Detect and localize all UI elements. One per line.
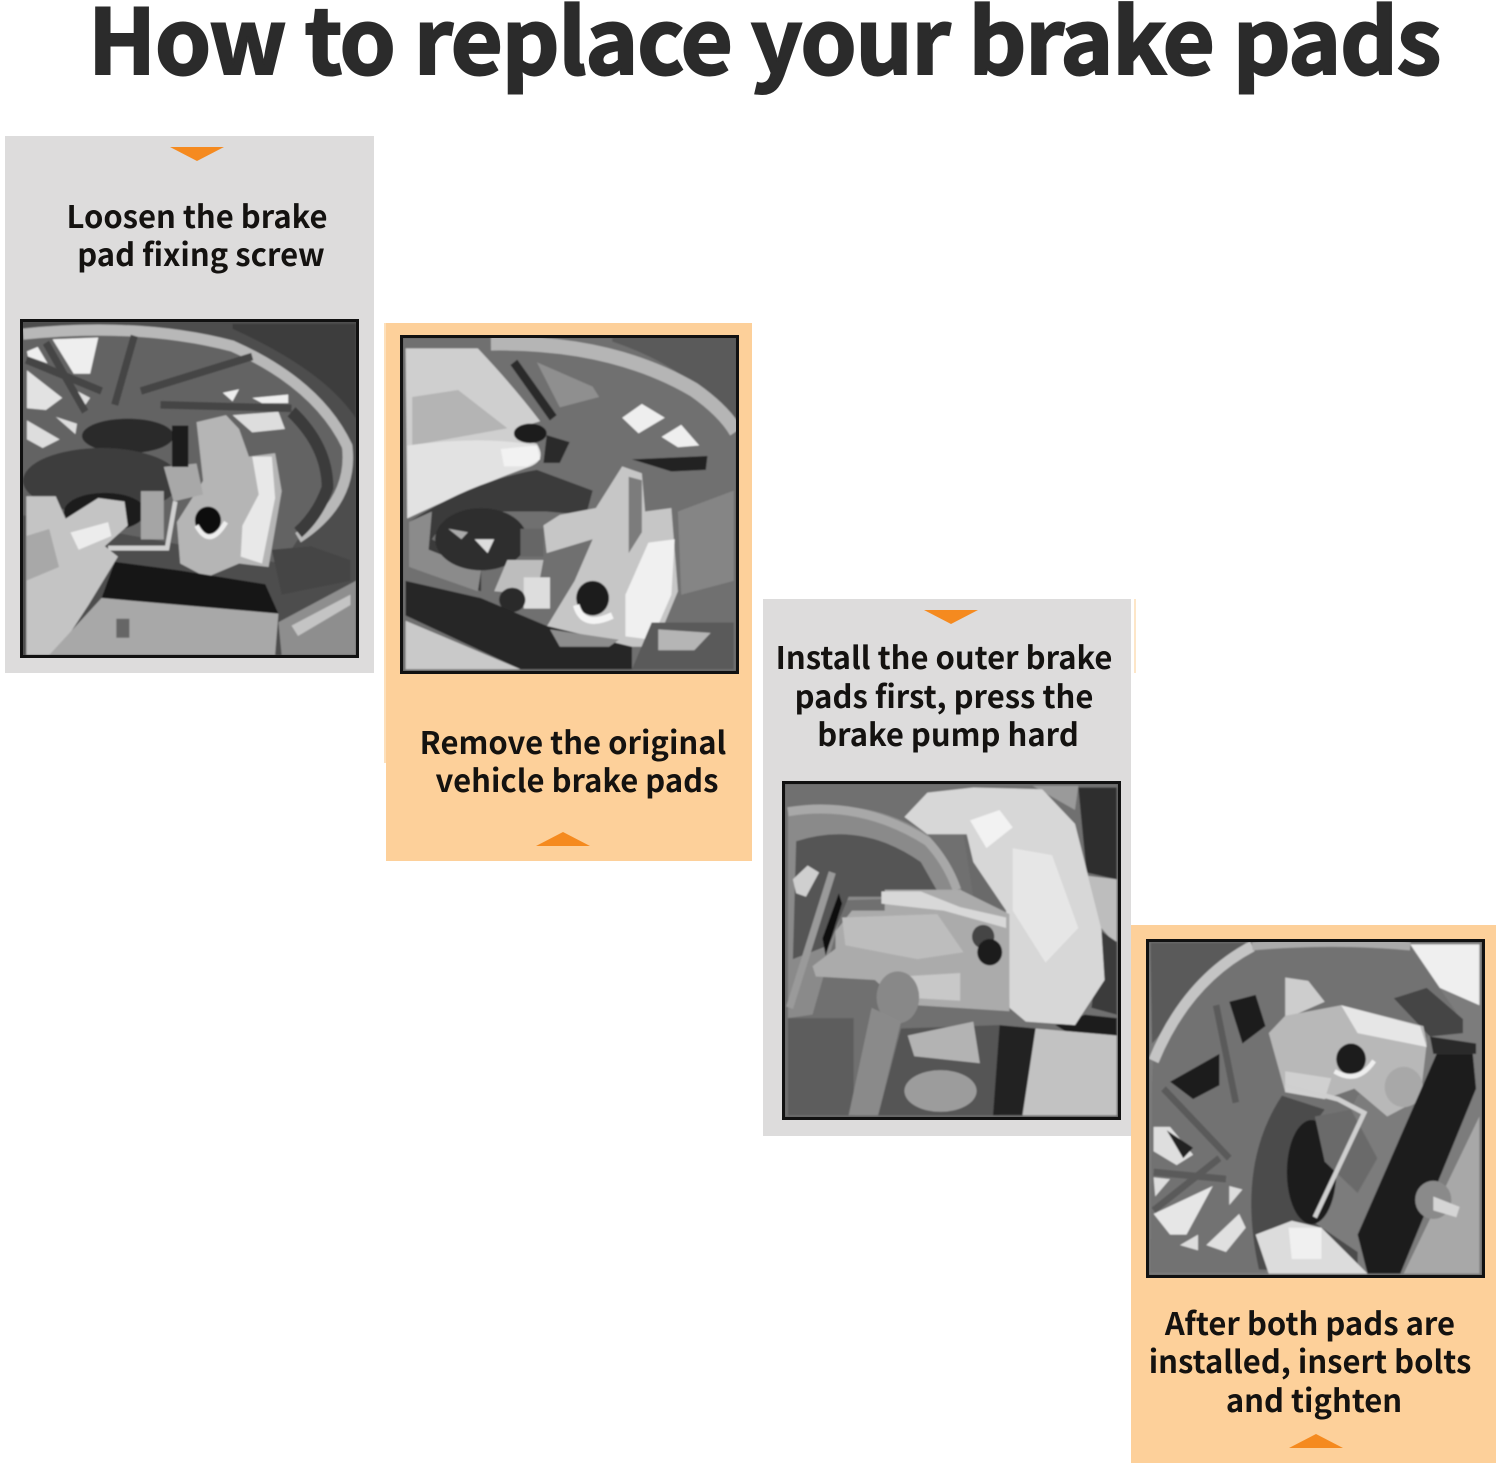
- text: step 3 caption: pads first, press the: [795, 672, 1093, 717]
- photo: fingers removing brake pad pin: [400, 335, 739, 674]
- photo: hand loosening caliper screw with hex key: [20, 319, 359, 658]
- panel: step 1 loosen screw: [5, 136, 374, 673]
- text: step 2 caption: vehicle brake pads: [436, 756, 718, 801]
- text: step 3 caption: Install the outer brake: [776, 633, 1112, 678]
- text: step 2 caption: [420, 718, 726, 801]
- panel: step 3 edge sliver: [1134, 599, 1136, 673]
- photo: hand pressing brake pump: [782, 781, 1121, 1120]
- text: step 1 caption: [66, 192, 328, 275]
- icon: up arrow step 2: [536, 832, 590, 846]
- text: step 4 caption: and tighten: [1226, 1376, 1402, 1421]
- icon: up arrow step 4: [1289, 1434, 1343, 1448]
- panel edge sliver: [384, 323, 386, 763]
- text: step 4 caption: installed, insert bolts: [1149, 1337, 1471, 1382]
- text: step 1 caption: Loosen the brake: [66, 192, 328, 237]
- text: step 3 caption: [776, 633, 1112, 755]
- icon: down arrow step 3: [924, 610, 978, 624]
- photo: hex key tightening bolts on caliper: [1146, 939, 1485, 1278]
- panel: step 4 insert bolts and tighten: [1131, 925, 1496, 1463]
- text: step 2 caption: Remove the original: [420, 718, 726, 763]
- text: step 4 caption: After both pads are: [1165, 1299, 1455, 1344]
- text: step 1 caption: pad fixing screw: [77, 230, 325, 275]
- panel: step 2 remove pads: [386, 323, 752, 861]
- text: step 4 caption: [1149, 1299, 1471, 1421]
- icon: down arrow step 1: [170, 147, 224, 161]
- text: step 3 caption: brake pump hard: [817, 710, 1079, 755]
- panel: step 3 install outer pads: [763, 599, 1131, 1136]
